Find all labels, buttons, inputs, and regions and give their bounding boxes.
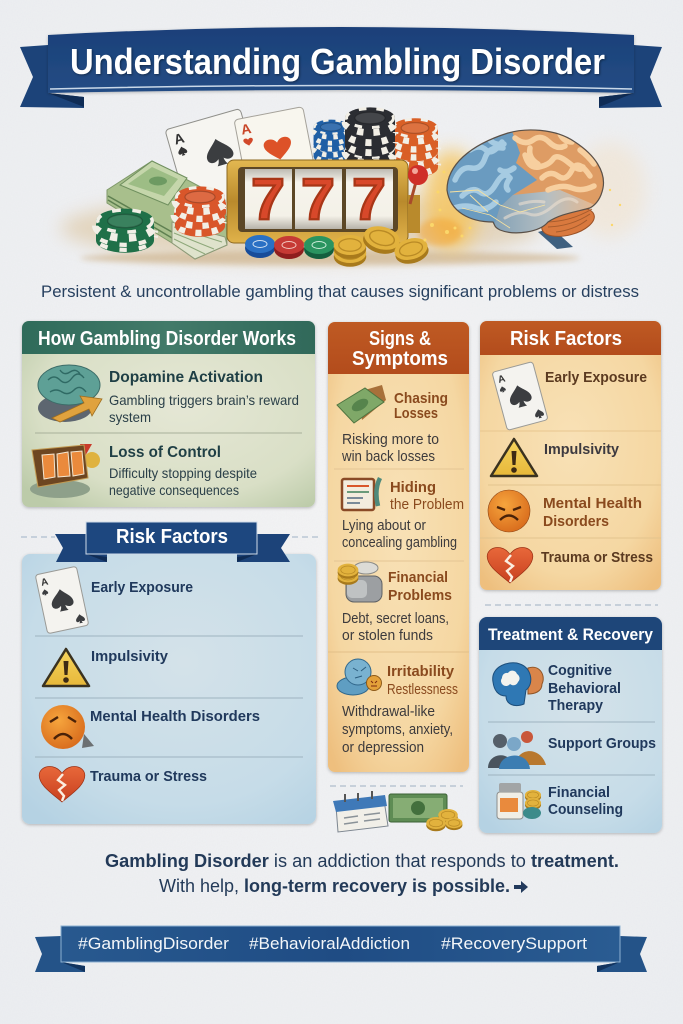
heading: Risk Factors	[510, 328, 622, 350]
ribbon: risk factors	[55, 522, 290, 562]
subtitle: Persistent & uncontrollable gambling that causes significant problems or distress	[41, 282, 639, 301]
text: dopamine activation	[109, 369, 299, 425]
icon: hiding notebook	[342, 478, 380, 510]
text: support groups: Support Groups	[548, 735, 656, 752]
text: dopamine activation: system	[109, 409, 151, 425]
item: financial problems: Debt, secret loans,	[342, 611, 449, 627]
divider above treatment	[485, 604, 658, 606]
brain	[446, 129, 604, 249]
heading: How Gambling Disorder Works	[38, 328, 296, 350]
item: irritability restlessness: Withdrawal-like	[342, 704, 435, 720]
item: hiding the problem: Hiding	[390, 479, 436, 496]
heading: Treatment & Recovery	[488, 625, 653, 644]
title text: Understanding Gambling Disorder	[70, 41, 605, 82]
item: hiding the problem: concealing gambling	[342, 535, 457, 551]
item: early exposure: Early Exposure	[545, 369, 647, 386]
icon: irritability figure	[337, 659, 382, 695]
text: dopamine activation: Gambling triggers brain’s reward	[109, 392, 299, 408]
heading	[352, 328, 448, 370]
slot machine with 777: 7	[352, 167, 386, 232]
item: chasing losses	[341, 390, 448, 465]
playing cards: A	[239, 120, 252, 138]
panel: signs and symptoms	[328, 322, 469, 772]
item: impulsivity	[43, 648, 169, 686]
item: trauma or stress: Trauma or Stress	[541, 549, 653, 566]
item: financial problems: Financial	[388, 569, 448, 586]
text: cognitive behavioral therapy: Therapy	[548, 697, 604, 714]
item: hiding the problem: the Problem	[390, 496, 464, 513]
playing cards: A	[172, 129, 186, 148]
orange chips	[174, 186, 226, 237]
item: trauma or stress: Trauma or Stress	[90, 768, 207, 785]
item: early exposure	[492, 362, 647, 430]
golden sparks	[424, 170, 621, 242]
icon: financial canister	[338, 562, 382, 602]
text: cognitive behavioral therapy	[548, 662, 621, 714]
slot lever	[408, 165, 428, 204]
hero illustration: cards, chips, slot machine and brain	[60, 107, 646, 267]
divider under signs and symptoms	[330, 785, 463, 787]
panel: risk factors (orange)	[480, 321, 661, 590]
icon: support group	[488, 731, 546, 769]
slot machine with 777: 7	[301, 167, 335, 232]
text: loss of control: negative consequences	[109, 482, 239, 498]
hashtags: #BehavioralAddiction	[249, 934, 410, 953]
playing cards	[165, 107, 322, 226]
item: chasing losses: Risking more to	[342, 432, 439, 448]
item: trauma or stress	[487, 547, 653, 583]
item: early exposure	[35, 566, 193, 634]
item: impulsivity: Impulsivity	[91, 648, 169, 665]
hashtags: #RecoverySupport	[441, 934, 587, 953]
item: hiding the problem	[342, 479, 464, 551]
sand dust backdrop	[60, 142, 646, 265]
icon: slot machine	[30, 444, 100, 498]
item: impulsivity	[491, 439, 620, 476]
text: cognitive behavioral therapy: Cognitive	[548, 662, 612, 679]
slot machine with 777	[227, 160, 420, 243]
item: financial problems: Problems	[388, 587, 452, 604]
item: mental health disorders	[488, 490, 642, 532]
item: impulsivity: Impulsivity	[544, 441, 620, 458]
panel: risk factors (blue)	[22, 522, 316, 824]
item: irritability restlessness: Irritability	[387, 663, 455, 680]
icon: money wallet	[337, 385, 386, 423]
item: mental health disorders: Mental Health	[543, 495, 642, 512]
text: financial counseling: Counseling	[548, 801, 623, 818]
item: irritability restlessness: Restlessness	[387, 681, 458, 698]
closing message: Gambling Disorder is an addiction that responds to treatment.	[105, 850, 619, 871]
item: irritability restlessness: symptoms, anxiety,	[342, 722, 453, 738]
text: loss of control: Loss of Control	[109, 444, 221, 461]
cash stack	[107, 161, 227, 259]
panel: treatment and recovery	[479, 617, 662, 833]
hashtag ribbon	[35, 926, 647, 972]
small casino tokens	[245, 235, 334, 259]
text: financial counseling	[548, 784, 623, 818]
closing message: With help, long-term recovery is possible.	[159, 875, 510, 896]
hashtags	[78, 934, 587, 953]
item: mental health disorders	[41, 705, 260, 749]
icon: arrow	[514, 881, 528, 893]
dashed separators beside risk factors ribbon	[21, 536, 320, 538]
item: hiding the problem: Lying about or	[342, 518, 426, 534]
text: financial counseling: Financial	[548, 784, 610, 801]
heading: Signs &	[369, 328, 431, 350]
title ribbon	[20, 27, 662, 108]
text: loss of control	[109, 444, 257, 498]
closing message	[105, 850, 619, 896]
item: mental health disorders: Mental Health Disorders	[90, 708, 260, 725]
text: loss of control: Difficulty stopping despite	[109, 465, 257, 481]
item: chasing losses: Losses	[394, 405, 438, 422]
item: irritability restlessness: or depression	[342, 740, 424, 756]
item: early exposure: Early Exposure	[91, 579, 193, 596]
item: trauma or stress	[39, 766, 207, 802]
icon: brain with arrow	[38, 365, 102, 422]
text: cognitive behavioral therapy: Behavioral	[548, 680, 621, 697]
text: dopamine activation: Dopamine Activation	[109, 369, 263, 386]
icon: calendar and cash	[333, 791, 462, 832]
green chips	[96, 209, 154, 253]
ribbon: risk factors: Risk Factors	[116, 526, 228, 548]
hashtags: #GamblingDisorder	[78, 934, 229, 953]
icon: pill bottle and coins	[497, 783, 541, 819]
slot machine with 777: 7	[251, 167, 285, 232]
item: mental health disorders: Disorders	[543, 513, 609, 530]
panel: how gambling disorder works	[22, 321, 315, 507]
icon: therapy heads	[493, 663, 543, 706]
gold coins	[334, 222, 431, 267]
item: financial problems: or stolen funds	[342, 628, 433, 644]
chip stacks	[314, 107, 438, 177]
item: financial problems	[342, 569, 452, 644]
item: irritability restlessness	[342, 663, 458, 756]
item: chasing losses: Chasing	[394, 390, 448, 407]
heading: Symptoms	[352, 348, 448, 370]
item: chasing losses: win back losses	[341, 449, 435, 465]
